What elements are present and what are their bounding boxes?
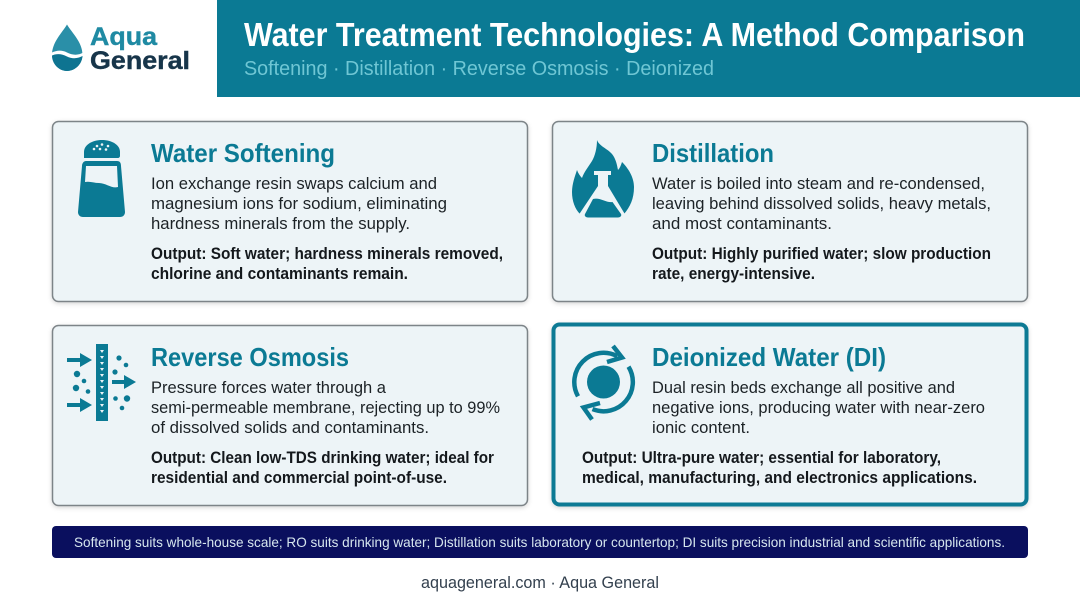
description <box>151 378 500 437</box>
icon: salt shaker <box>78 140 125 217</box>
heading: Deionized Water (DI) <box>652 342 886 372</box>
panel: distillation <box>552 122 1028 302</box>
description: Water is boiled into steam and re-condensed, <box>652 174 985 193</box>
description: leaving behind dissolved solids, heavy metals, <box>652 194 991 213</box>
panel: reverse osmosis <box>52 326 528 506</box>
icon: flame with flask <box>572 140 634 220</box>
description <box>652 378 985 437</box>
description: of dissolved solids and contaminants. <box>151 418 429 437</box>
description: ionic content. <box>652 418 750 437</box>
description: Ion exchange resin swaps calcium and <box>151 174 437 193</box>
heading: Water Softening <box>151 138 335 168</box>
logo: Aqua <box>90 23 158 51</box>
description: semi-permeable membrane, rejecting up to 99% <box>151 398 500 417</box>
logo: General <box>90 47 190 75</box>
title: Water Treatment Technologies: A Method Comparison <box>244 16 1025 53</box>
icon: cycle arrows around ion <box>574 346 633 420</box>
output: Output: Highly purified water; slow production <box>652 244 991 263</box>
output: chlorine and contaminants remain. <box>151 264 408 283</box>
panel: water softening <box>52 122 528 302</box>
description: hardness minerals from the supply. <box>151 214 410 233</box>
description: magnesium ions for sodium, eliminating <box>151 194 447 213</box>
header banner <box>217 0 1080 97</box>
footer: aquageneral.com · Aqua General <box>421 574 659 592</box>
summary bar <box>52 526 1028 558</box>
icon: membrane with arrows <box>67 344 136 421</box>
description: Dual resin beds exchange all positive and <box>652 378 955 397</box>
logo <box>51 23 190 75</box>
output: rate, energy-intensive. <box>652 264 815 283</box>
output: medical, manufacturing, and electronics applications. <box>582 468 977 487</box>
output: Output: Soft water; hardness minerals removed, <box>151 244 503 263</box>
summary bar: Softening suits whole-house scale; RO suits drinking water; Distillation suits laboratory or countertop; DI suits precision industrial and scientific applications. <box>74 534 1005 550</box>
output <box>151 244 503 283</box>
description <box>151 174 447 233</box>
subtitle: Softening · Distillation · Reverse Osmosis · Deionized <box>244 57 714 80</box>
output <box>582 448 977 487</box>
output <box>151 448 494 487</box>
description: Pressure forces water through a <box>151 378 387 397</box>
output: residential and commercial point-of-use. <box>151 468 447 487</box>
heading: Distillation <box>652 138 774 168</box>
description <box>652 174 991 233</box>
heading: Reverse Osmosis <box>151 342 349 372</box>
description: and most contaminants. <box>652 214 832 233</box>
output <box>652 244 991 283</box>
panel: deionized water <box>554 324 1026 504</box>
description: negative ions, producing water with near-zero <box>652 398 985 417</box>
output: Output: Clean low-TDS drinking water; ideal for <box>151 448 494 467</box>
output: Output: Ultra-pure water; essential for laboratory, <box>582 448 941 467</box>
